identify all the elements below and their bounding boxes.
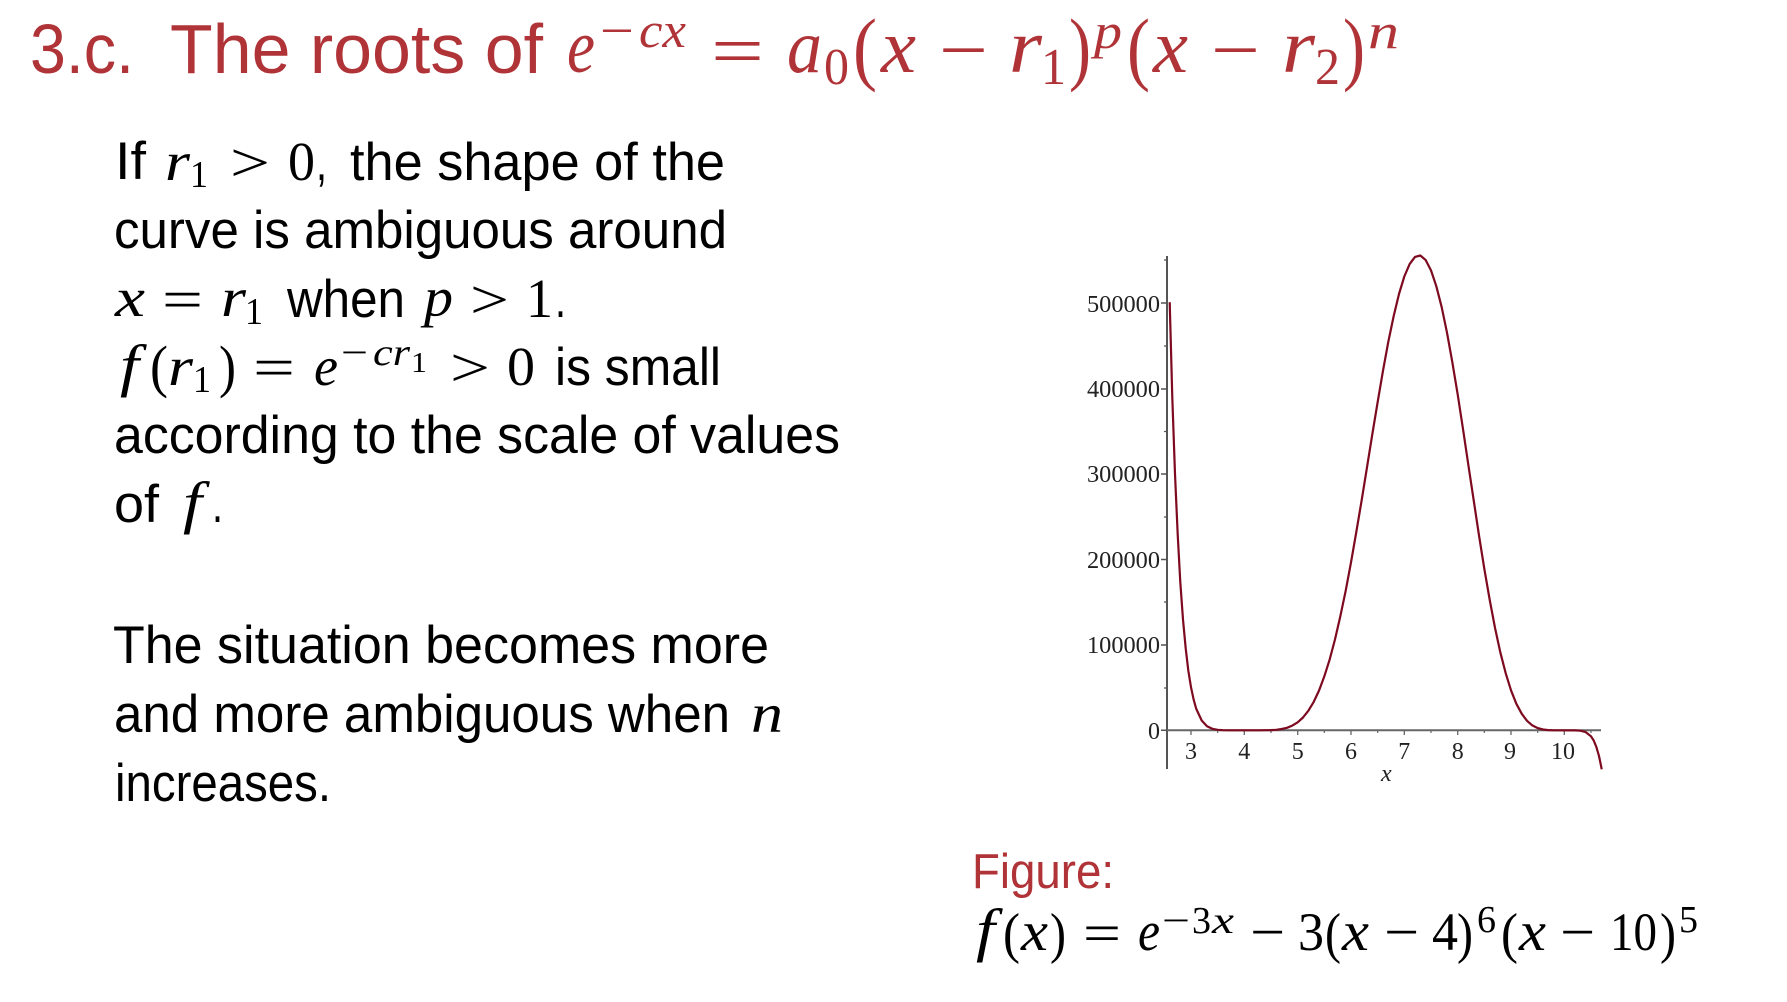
title: ) — [1069, 2, 1091, 93]
text block: shape of the curve: when — [286, 270, 405, 329]
text block: shape of the curve: r — [221, 267, 247, 328]
figure caption formula: 5 — [1679, 899, 1698, 941]
text block: shape of the curve: according to the scale of values — [114, 406, 840, 465]
figure caption formula: x — [1211, 900, 1234, 942]
figure caption formula: 3 — [1192, 900, 1211, 942]
x axis labels: 7 — [1398, 739, 1410, 765]
text block: shape of the curve: > — [230, 132, 270, 193]
text block: shape of the curve: = — [162, 269, 203, 330]
text block: shape of the curve: 1 — [190, 154, 208, 196]
curve — [1170, 256, 1602, 769]
title: x — [880, 5, 916, 89]
title: − — [939, 10, 988, 90]
text block: shape of the curve: cr — [373, 332, 410, 374]
text block: increasing n: and more ambiguous when — [114, 685, 730, 744]
figure caption formula: = — [1083, 903, 1121, 963]
text block: shape of the curve: . — [555, 270, 566, 329]
figure caption formula: − — [1560, 902, 1595, 962]
text block: increasing n: n — [751, 683, 783, 744]
text block: shape of the curve: . — [212, 475, 223, 534]
y axis labels: 300000 — [1087, 462, 1160, 488]
x axis labels: 9 — [1504, 739, 1516, 765]
figure caption formula: 10 — [1610, 902, 1657, 962]
figure caption formula: f — [976, 897, 1004, 963]
text block: increasing n: increases. — [115, 754, 331, 813]
text block: shape of the curve: 0 — [288, 131, 315, 192]
text block: shape of the curve: 0 — [507, 336, 535, 397]
title: r — [1009, 5, 1042, 89]
title: cx — [639, 2, 686, 58]
line chart: f(x) with axes — [1087, 256, 1602, 787]
figure caption formula: e — [1138, 901, 1160, 963]
figure caption formula: 4 — [1432, 902, 1458, 962]
y axis labels: 0 — [1148, 719, 1160, 745]
text block: shape of the curve: curve is ambiguous around — [114, 201, 727, 260]
text block: shape of the curve: is small — [555, 338, 721, 397]
title: − — [600, 3, 634, 60]
x axis with ticks — [1167, 730, 1601, 735]
text block: shape of the curve: p — [420, 267, 453, 328]
title: x — [1152, 5, 1188, 89]
y axis labels: 200000 — [1087, 548, 1160, 574]
title: 3.c. — [30, 10, 134, 88]
x axis labels: 5 — [1292, 739, 1304, 765]
text block: shape of the curve: 1 — [526, 268, 553, 329]
figure caption formula: ( — [1501, 903, 1518, 965]
figure caption formula — [976, 897, 1698, 965]
y axis labels: 500000 — [1087, 292, 1160, 318]
y axis labels: 400000 — [1087, 377, 1160, 403]
text block: shape of the curve: > — [470, 269, 509, 330]
text block: shape of the curve: = — [253, 337, 295, 398]
figure caption formula: ( — [1325, 903, 1341, 965]
figure caption formula: ) — [1457, 903, 1473, 965]
text block: shape of the curve: 1 — [411, 348, 427, 379]
figure caption label: Figure: — [972, 845, 1114, 899]
figure caption formula: − — [1384, 902, 1419, 962]
figure caption formula: 3 — [1298, 902, 1324, 962]
figure caption formula: − — [1162, 900, 1190, 942]
figure caption formula: x — [1518, 901, 1546, 963]
text block: shape of the curve: 1 — [245, 291, 263, 333]
title: ( — [1127, 2, 1150, 93]
text block: shape of the curve: e — [314, 336, 338, 397]
text block: shape of the curve: ) — [219, 334, 236, 399]
y axis labels — [1087, 292, 1160, 745]
figure caption formula: ) — [1050, 903, 1066, 965]
text block: shape of the curve: x — [114, 267, 146, 328]
text block: shape of the curve: the shape of the — [350, 133, 725, 192]
text block: shape of the curve: , — [316, 133, 327, 192]
figure caption formula: x — [1341, 901, 1369, 963]
figure caption formula: ) — [1660, 903, 1676, 965]
title: n — [1368, 3, 1399, 59]
text block: shape of the curve: r — [168, 336, 194, 397]
text block: shape of the curve: 1 — [193, 359, 211, 401]
title: ) — [1343, 2, 1365, 93]
text block: shape of the curve — [114, 131, 840, 535]
title: ( — [853, 2, 877, 93]
text block: shape of the curve: f — [120, 333, 147, 398]
title: r — [1282, 5, 1315, 89]
title: a — [787, 5, 822, 89]
title: The roots of — [170, 10, 544, 88]
figure caption formula: 6 — [1477, 899, 1496, 941]
text block: increasing n: The situation becomes more — [113, 616, 769, 675]
text block: shape of the curve: If — [115, 132, 146, 191]
text block: shape of the curve: f — [183, 470, 210, 535]
title: e — [567, 5, 595, 89]
text block: shape of the curve: of — [114, 475, 159, 534]
text block: increasing n — [113, 616, 783, 813]
title: = — [711, 11, 764, 91]
y axis with ticks — [1161, 256, 1167, 769]
title: p — [1091, 3, 1122, 59]
x axis labels: 10 — [1551, 739, 1575, 765]
text block: shape of the curve: − — [341, 332, 368, 374]
text block: shape of the curve: r — [165, 131, 191, 192]
text block: shape of the curve: > — [450, 337, 490, 398]
title: − — [1211, 10, 1260, 90]
x axis title: x — [1380, 761, 1392, 787]
title — [30, 2, 1399, 96]
x axis labels: 8 — [1452, 739, 1464, 765]
x axis labels — [1185, 739, 1575, 765]
y axis labels: 100000 — [1087, 633, 1160, 659]
title: 1 — [1041, 39, 1066, 96]
x axis labels: 3 — [1185, 739, 1197, 765]
figure caption formula: x — [1020, 901, 1048, 963]
figure caption formula: ( — [1003, 903, 1020, 965]
x axis labels: 4 — [1238, 739, 1250, 765]
title: 2 — [1315, 39, 1340, 96]
text block: shape of the curve: ( — [150, 334, 168, 399]
title: 0 — [824, 39, 849, 96]
x axis labels: 6 — [1345, 739, 1357, 765]
figure caption formula: − — [1250, 902, 1285, 962]
